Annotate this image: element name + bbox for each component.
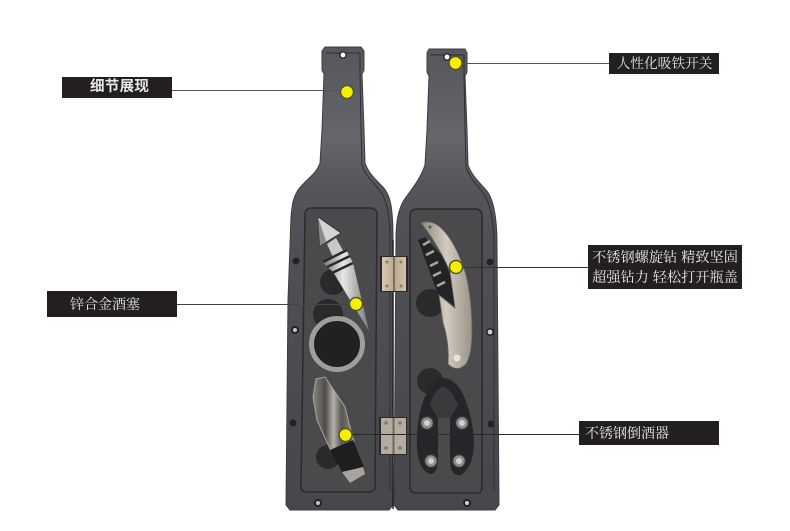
- label: details heading: [62, 77, 172, 98]
- screws: [463, 258, 494, 507]
- label: stainless corkscrew: 不锈钢螺旋钻 精致坚固: [592, 250, 738, 266]
- shell rim groove: [326, 53, 390, 490]
- foam tray: [301, 208, 377, 492]
- label: zinc alloy stopper: 锌合金酒塞: [70, 296, 140, 312]
- hinge gap: [392, 240, 394, 509]
- hanging hole: [444, 54, 450, 60]
- screws: [290, 258, 322, 507]
- leader line: pourer: [350, 434, 579, 436]
- right case half: [394, 49, 499, 510]
- left case half: [286, 47, 393, 510]
- wine pourer: [313, 377, 365, 483]
- wine stopper: [318, 217, 369, 331]
- corkscrew: [416, 222, 472, 368]
- top hinge: [380, 256, 408, 292]
- label: stainless pourer: 不锈钢倒酒器: [585, 425, 669, 441]
- label: magnetic switch: [609, 53, 719, 74]
- foam tray: [410, 209, 482, 493]
- leader line: magnetic switch: [460, 62, 609, 64]
- bottom hinge: [379, 417, 407, 455]
- marker dots: [339, 56, 462, 442]
- label: stainless pourer: [579, 421, 719, 445]
- label: details heading: 细节展现: [90, 79, 149, 95]
- shell rim groove: [430, 55, 494, 490]
- label: stainless corkscrew: 超强钻力 轻松打开瓶盖: [592, 270, 738, 286]
- foil cutter: [417, 368, 474, 475]
- label: zinc alloy stopper: [47, 291, 177, 317]
- leader line: corkscrew: [461, 266, 588, 268]
- leader line: zinc alloy stopper: [177, 304, 351, 306]
- leader line: details: [172, 90, 341, 92]
- drip ring: [312, 299, 362, 370]
- hanging hole: [340, 52, 346, 58]
- label: magnetic switch: 人性化吸铁开关: [617, 56, 712, 71]
- label: stainless corkscrew: [588, 245, 742, 289]
